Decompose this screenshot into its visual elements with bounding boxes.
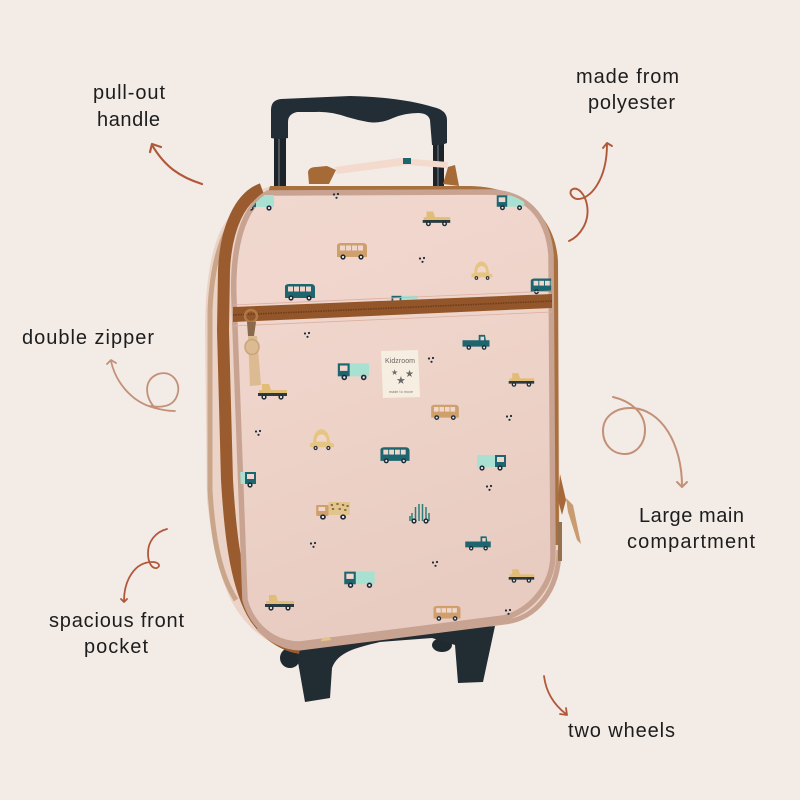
vehicle print pattern <box>227 193 559 655</box>
vehicle: striped dome car <box>410 504 429 524</box>
label: pull-out handle: pull-out <box>93 82 165 104</box>
label: spacious front pocket: pocket <box>84 636 148 658</box>
label: spacious front pocket: spacious front <box>49 610 184 632</box>
arrow: pull-out handle <box>150 144 202 184</box>
label: pull-out handle <box>93 82 165 131</box>
front pocket zipper <box>233 291 552 326</box>
label: large main compartment: compartment <box>627 531 755 553</box>
carry handle <box>308 158 459 186</box>
label: made from polyester <box>576 66 679 114</box>
telescopic poles <box>274 136 444 188</box>
brand label patch: Kidzroom <box>385 358 415 365</box>
wheels and legs <box>280 626 495 702</box>
vehicle: speckled truck <box>316 502 350 520</box>
label: made from polyester: made from <box>576 66 679 88</box>
brand label patch: made to move <box>389 390 413 394</box>
label: spacious front pocket <box>49 610 184 658</box>
side zipper pull <box>558 474 581 561</box>
label: pull-out handle: handle <box>97 109 160 131</box>
suitcase illustration <box>205 96 581 702</box>
arrow: spacious front pocket <box>121 529 167 602</box>
label: double zipper: double zipper <box>22 327 154 349</box>
brand label patch: ★ <box>391 368 398 377</box>
arrow: double zipper <box>107 360 178 411</box>
arrow: made from polyester <box>569 143 612 241</box>
arrow: two wheels <box>544 676 567 715</box>
label: made from polyester: polyester <box>588 92 675 114</box>
pull-out handle grip <box>271 96 447 145</box>
label: large main compartment: Large main <box>639 505 744 527</box>
brand label patch: ★ <box>405 369 414 380</box>
arrow: large main compartment <box>603 397 687 487</box>
brand label patch <box>381 350 420 398</box>
brand label patch: ★ <box>396 374 406 387</box>
case body <box>205 186 560 650</box>
label: two wheels: two wheels <box>568 720 675 742</box>
label: large main compartment <box>627 505 755 553</box>
zipper pull tab <box>245 310 261 386</box>
